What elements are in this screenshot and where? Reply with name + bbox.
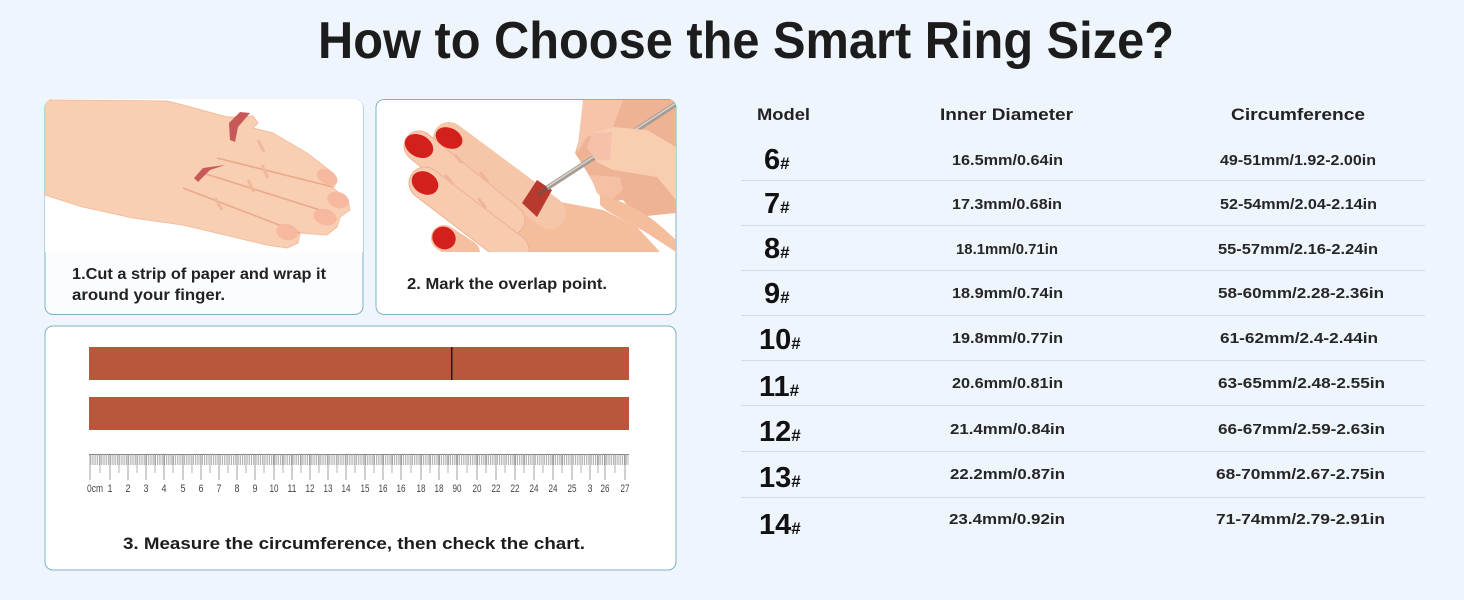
- title: How to Choose the Smart Ring Size?: [318, 12, 1174, 70]
- row 7#: [764, 188, 1377, 220]
- ruler numbers: 26: [600, 483, 610, 495]
- row 6#: [764, 144, 1376, 176]
- row 9#: 58-60mm/2.28-2.36in: [1218, 285, 1384, 302]
- illustration: hand marking strip with pen: [401, 100, 676, 254]
- row 6#: 49-51mm/1.92-2.00in: [1220, 152, 1376, 169]
- ruler numbers: 25: [568, 483, 576, 495]
- row 14#: [759, 509, 1385, 541]
- ruler numbers: 4: [162, 483, 166, 495]
- step 1 caption: 1.Cut a strip of paper and wrap it: [72, 266, 327, 283]
- row 13#: 22.2mm/0.87in: [950, 466, 1065, 483]
- row 7#: 17.3mm/0.68in: [952, 196, 1062, 213]
- row 11#: 11#: [759, 371, 800, 403]
- row 14#: 14#: [759, 509, 801, 541]
- row 10#: 19.8mm/0.77in: [952, 330, 1063, 347]
- step 2 caption: 2. Mark the overlap point.: [407, 276, 607, 293]
- ruler: [87, 454, 630, 495]
- row 11#: [759, 371, 1385, 403]
- row 13#: 68-70mm/2.67-2.75in: [1216, 466, 1385, 483]
- row 12#: 66-67mm/2.59-2.63in: [1218, 421, 1385, 438]
- ruler numbers: 15: [360, 483, 370, 495]
- row 13#: [759, 462, 1385, 494]
- ruler numbers: 6: [198, 483, 204, 495]
- icon: paper strip on finger: [522, 180, 552, 217]
- ruler numbers: 27: [620, 483, 630, 495]
- row 9#: 9#: [764, 278, 790, 310]
- ruler numbers: 13: [324, 483, 332, 495]
- row 6#: 16.5mm/0.64in: [952, 152, 1063, 169]
- ruler numbers: 18: [434, 483, 444, 495]
- right hand thumb: [587, 127, 676, 200]
- row 8#: [764, 233, 1378, 265]
- row 6#: 6#: [764, 144, 790, 176]
- icon: pen: [539, 103, 676, 194]
- ruler numbers: 24: [548, 483, 558, 495]
- hand silhouette: [45, 100, 350, 248]
- row 14#: 23.4mm/0.92in: [949, 511, 1065, 528]
- ruler numbers: 22: [510, 483, 520, 495]
- marked paper strip: [89, 347, 629, 380]
- ruler numbers: 2: [126, 483, 130, 495]
- row 12#: 12#: [759, 416, 801, 448]
- ruler numbers: 1: [108, 483, 112, 495]
- ruler numbers: 3: [588, 483, 592, 495]
- row 8#: 18.1mm/0.71in: [956, 241, 1058, 258]
- ruler numbers: 18: [416, 483, 426, 495]
- ruler numbers: 14: [342, 483, 350, 495]
- row 9#: 18.9mm/0.74in: [952, 285, 1063, 302]
- ruler numbers: 8: [234, 483, 240, 495]
- row 11#: 63-65mm/2.48-2.55in: [1218, 375, 1385, 392]
- ruler numbers: 16: [378, 483, 388, 495]
- nails: [276, 169, 349, 240]
- row 7#: 52-54mm/2.04-2.14in: [1220, 196, 1377, 213]
- row 12#: 21.4mm/0.84in: [950, 421, 1065, 438]
- row 9#: [764, 278, 1384, 310]
- ruler numbers: 5: [180, 483, 186, 495]
- ruler numbers: [87, 483, 630, 495]
- row 10#: 61-62mm/2.4-2.44in: [1220, 330, 1378, 347]
- right hand back fingers: [575, 100, 676, 252]
- ruler numbers: 3: [144, 483, 148, 495]
- ruler numbers: 12: [306, 483, 314, 495]
- ruler numbers: 24: [530, 483, 538, 495]
- nails: [404, 127, 462, 250]
- illustration: hand with paper strips: [45, 99, 363, 252]
- panel: step 3 measure: [45, 326, 676, 570]
- table header: [757, 105, 1365, 124]
- ruler numbers: 22: [492, 483, 500, 495]
- row 7#: 7#: [764, 188, 790, 220]
- icon: paper strip on ring finger: [194, 165, 225, 182]
- ruler numbers: 10: [270, 483, 278, 495]
- row 14#: 71-74mm/2.79-2.91in: [1216, 511, 1385, 528]
- row 13#: 13#: [759, 462, 801, 494]
- size chart table: [741, 105, 1425, 541]
- panel: step 1 wrap finger: [45, 99, 363, 314]
- ruler numbers: 90: [452, 483, 462, 495]
- icon: paper strip on pinky: [229, 112, 250, 142]
- ruler numbers: 16: [396, 483, 406, 495]
- row 10#: [759, 324, 1378, 356]
- step 1 caption: around your finger.: [72, 287, 225, 304]
- ruler numbers: 7: [216, 483, 222, 495]
- ruler numbers: 0cm: [87, 483, 103, 495]
- table header: Inner Diameter: [940, 105, 1073, 124]
- table header: Circumference: [1231, 105, 1365, 124]
- row 8#: 8#: [764, 233, 790, 265]
- step 1 caption: [72, 266, 327, 304]
- row 11#: 20.6mm/0.81in: [952, 375, 1063, 392]
- table header: Model: [757, 105, 810, 124]
- step 3 caption: 3. Measure the circumference, then check the chart.: [123, 534, 585, 553]
- panel: step 2 mark overlap: [376, 100, 676, 314]
- row 12#: [759, 416, 1385, 448]
- ruler numbers: 20: [472, 483, 482, 495]
- ruler numbers: 11: [288, 483, 296, 495]
- row 10#: 10#: [759, 324, 801, 356]
- row 8#: 55-57mm/2.16-2.24in: [1218, 241, 1378, 258]
- ruler numbers: 9: [252, 483, 258, 495]
- plain paper strip: [89, 397, 629, 430]
